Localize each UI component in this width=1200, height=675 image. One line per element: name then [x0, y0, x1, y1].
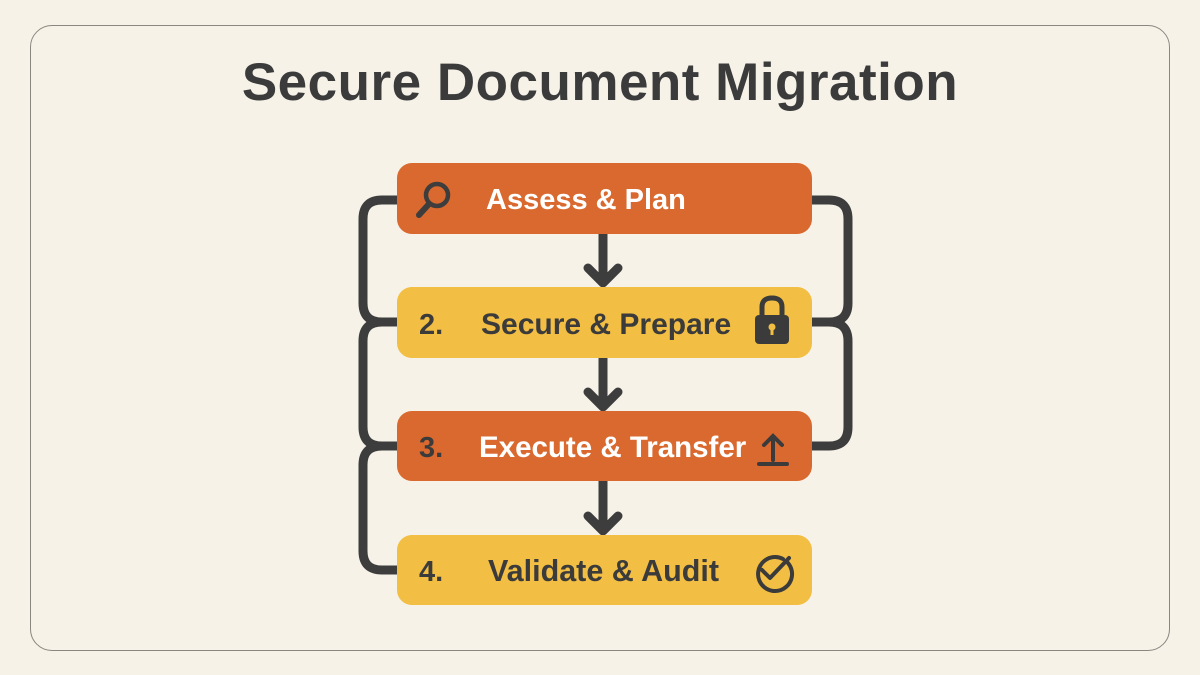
step 4: Validate & Audit — [488, 554, 719, 588]
connectors: right loops — [810, 200, 848, 446]
step 3: 3. — [419, 432, 443, 464]
step 3: Execute & Transfer — [479, 431, 747, 464]
step 4: 4. — [419, 556, 443, 588]
step 4 — [397, 535, 812, 605]
step 3 — [397, 411, 812, 481]
step 2 — [397, 287, 812, 358]
step 1 — [397, 163, 812, 234]
arrows down — [588, 234, 618, 531]
connectors: left loops — [363, 200, 400, 570]
title: Secure Document Migration — [242, 53, 958, 112]
step 1: Assess & Plan — [486, 184, 686, 216]
step 2: 2. — [419, 309, 443, 341]
step 2: Secure & Prepare — [481, 308, 731, 341]
